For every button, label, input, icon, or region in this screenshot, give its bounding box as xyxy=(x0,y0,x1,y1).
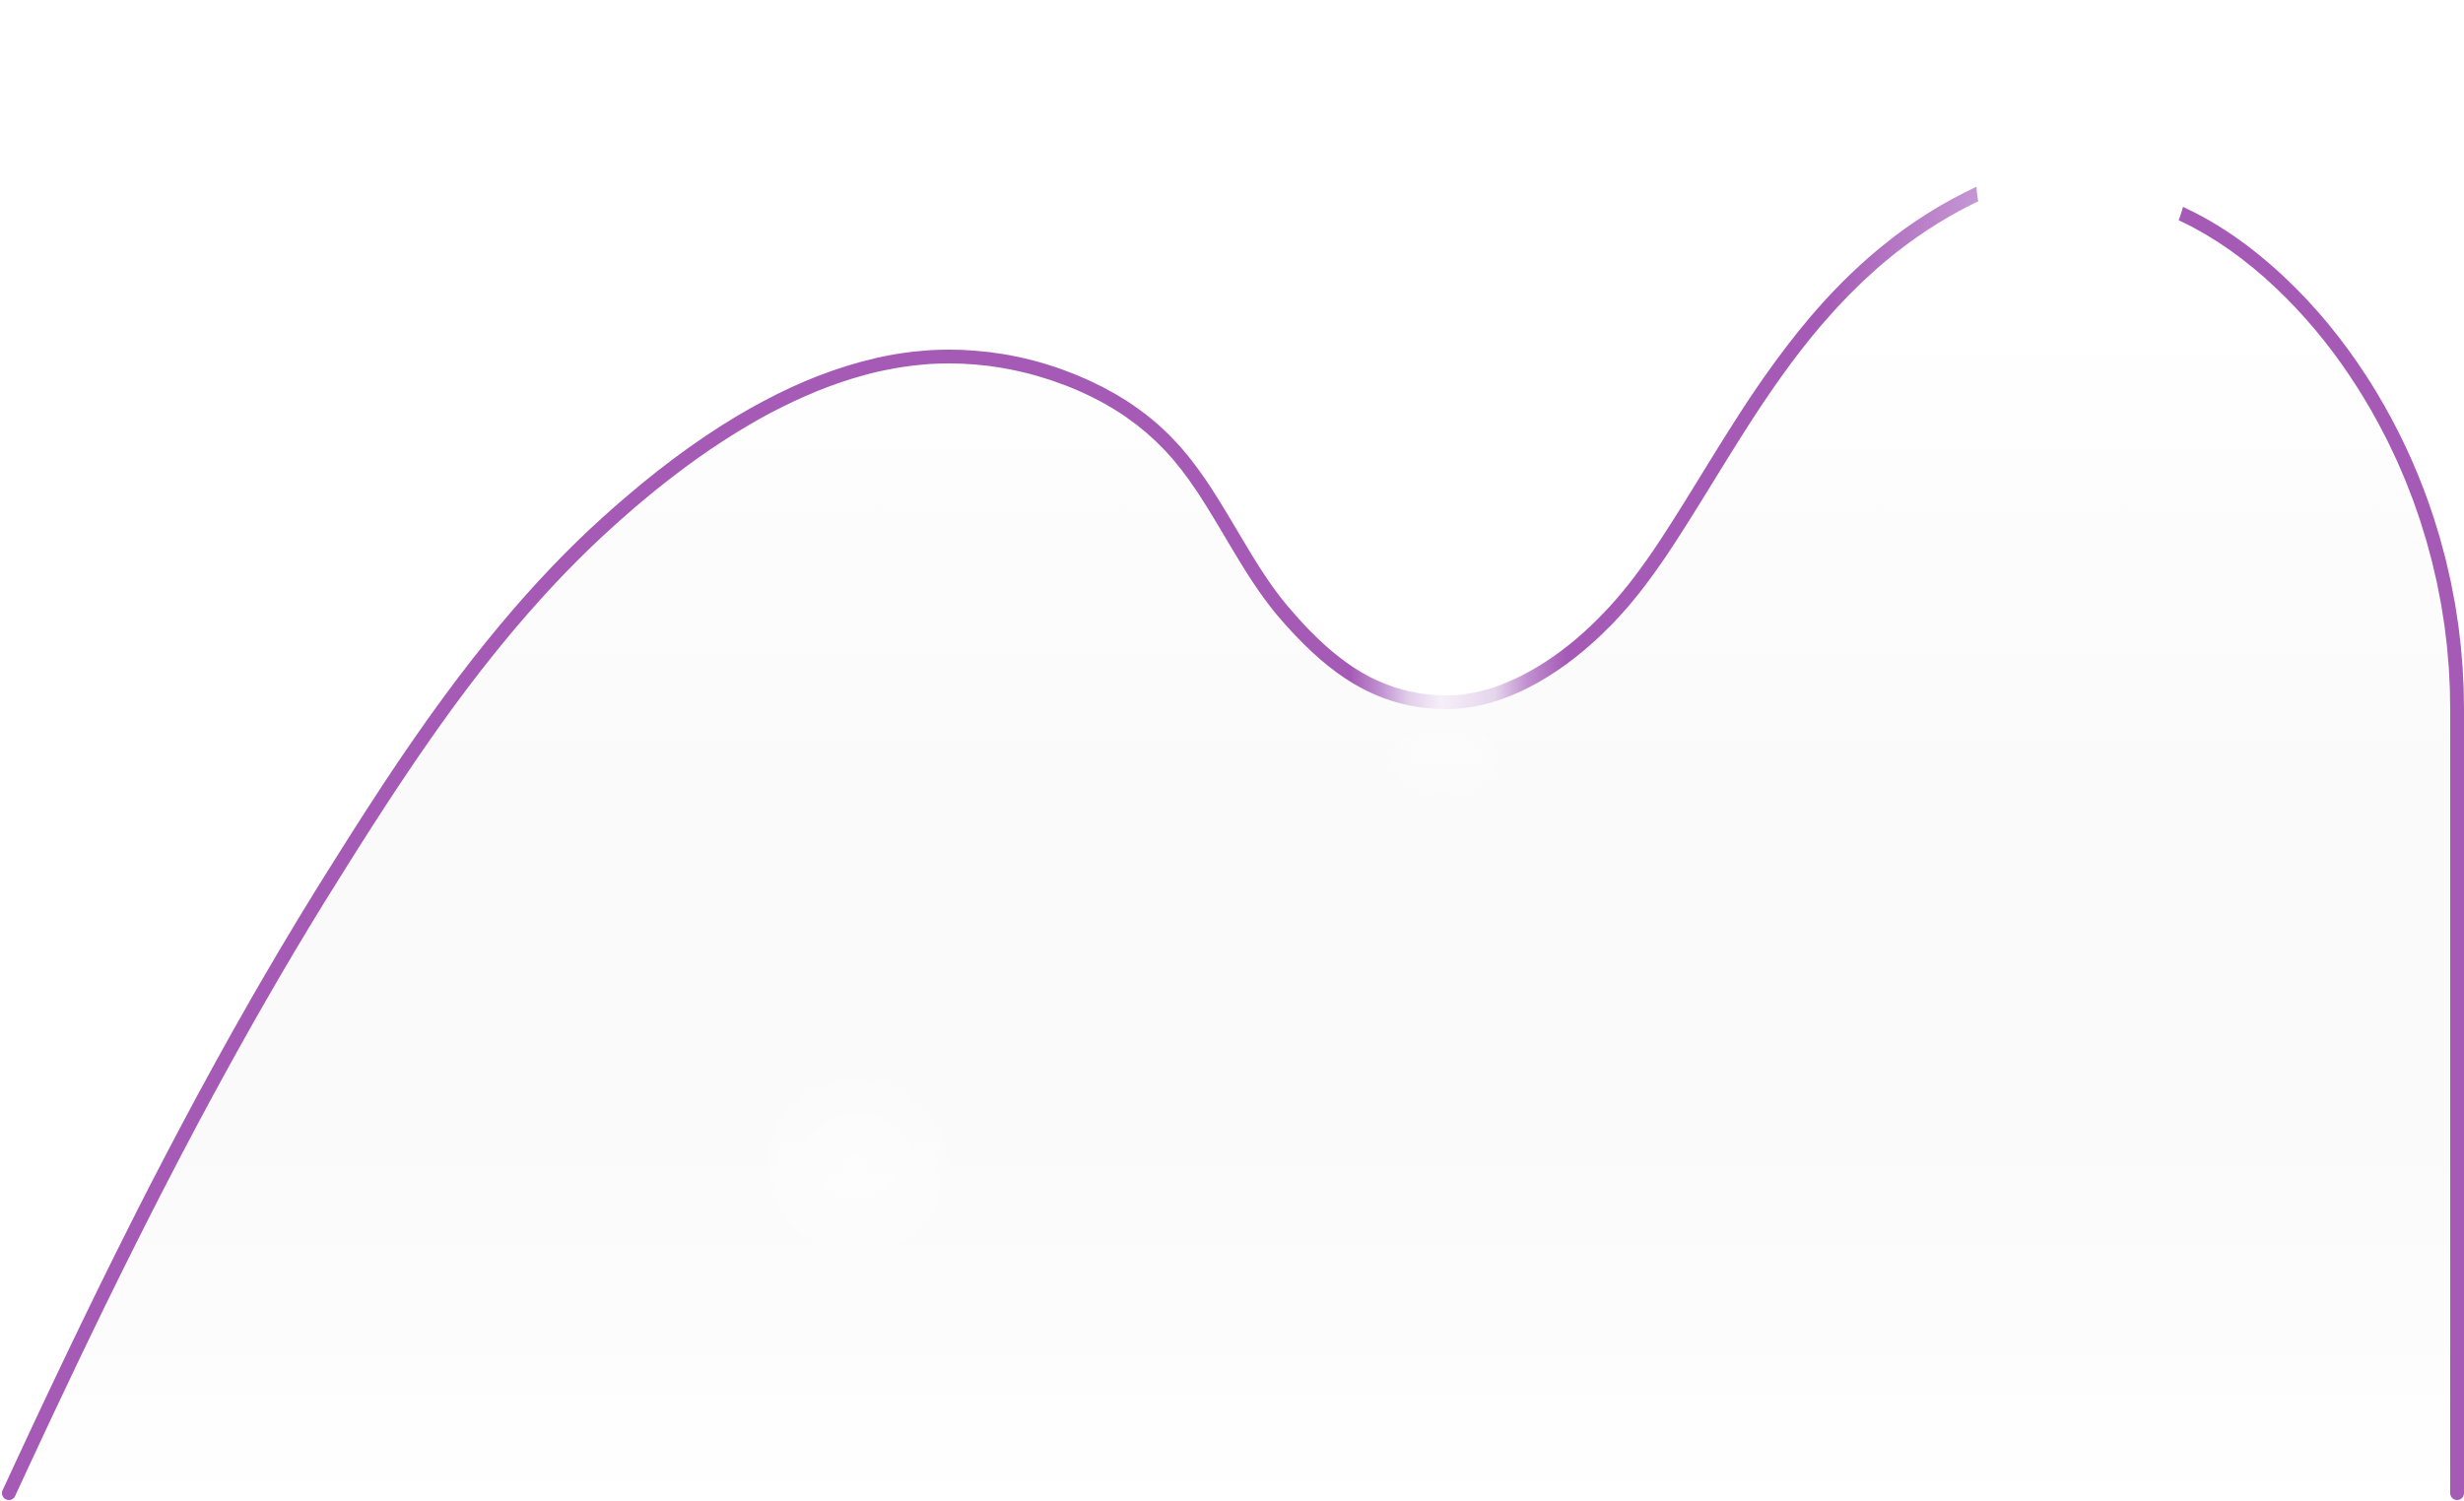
gap: white circle masking the curve at top right xyxy=(1976,77,2186,286)
highlight: soft glow lower left xyxy=(744,1059,970,1275)
highlight: soft glow under dip xyxy=(1357,699,1534,817)
line end cap: bottom right xyxy=(2450,1486,2464,1500)
line end cap: bottom left xyxy=(2,1486,16,1500)
curve: main purple line from bottom left to top gap xyxy=(9,178,2010,1493)
curve: right purple arc descending to bottom right xyxy=(2146,197,2457,1493)
